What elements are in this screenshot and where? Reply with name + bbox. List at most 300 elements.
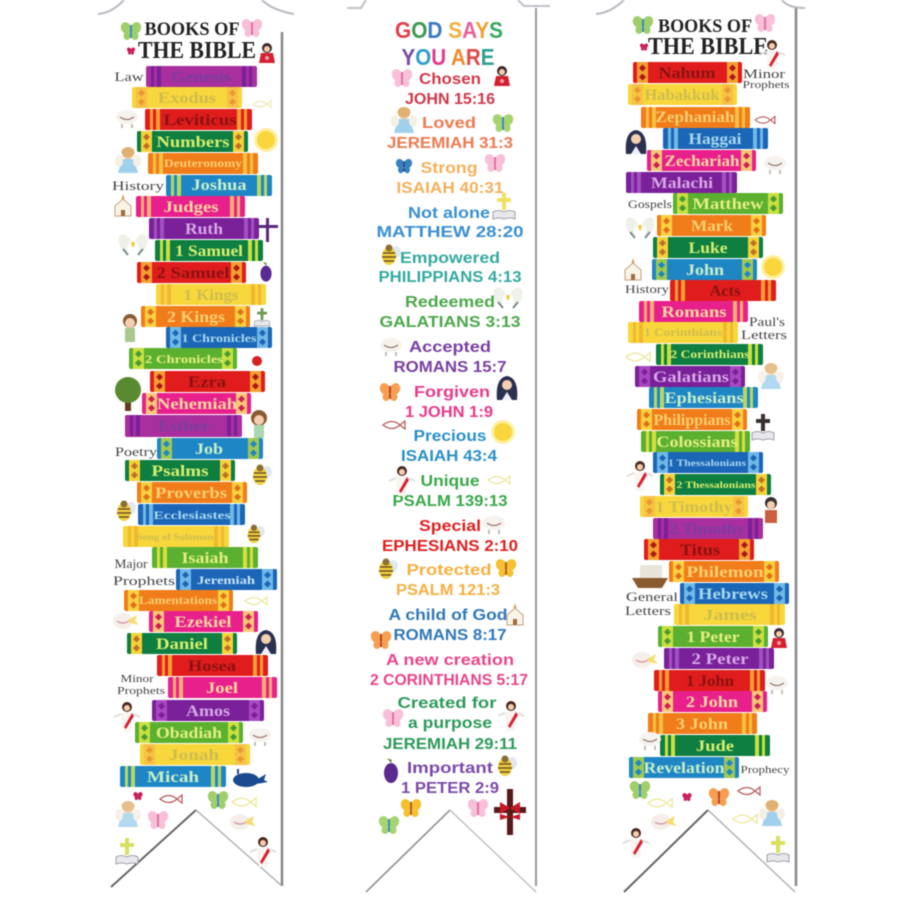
book: Ezekiel (149, 611, 258, 632)
verse: Redeemed (380, 294, 521, 331)
book: Haggai (663, 128, 768, 149)
icon: sheep (764, 156, 786, 174)
book: Song of Solomon: Song of Solomon (136, 532, 214, 542)
heading: books of the bible right (648, 16, 768, 60)
verse: Precious (401, 428, 497, 465)
category label: Minor Prophets (117, 673, 165, 697)
verse: Loved (387, 115, 513, 152)
verse: Unique: Unique (420, 473, 480, 490)
book: Jeremiah: Jeremiah (197, 575, 256, 587)
book: Exodus (132, 87, 242, 108)
category label: Paul's Letters: Paul's (749, 314, 785, 329)
book: 1 Thessalonians (653, 452, 763, 473)
icon: yellow fish (245, 597, 267, 605)
book: Malachi (626, 172, 737, 193)
verse: Accepted: Accepted (409, 339, 491, 356)
icon: nun (626, 130, 646, 154)
book: Mark: Mark (691, 218, 733, 235)
book: Luke: Luke (688, 240, 728, 257)
icon: bee (253, 464, 272, 485)
icon: yellow fish (626, 353, 650, 361)
verse: A child of God (388, 607, 508, 644)
icon: nun (497, 376, 517, 400)
book: Lamentations: Lamentations (139, 595, 218, 607)
verse: Redeemed: GALATIANS 3:13 (380, 314, 521, 331)
icon: green butterfly (631, 14, 655, 34)
verse: Loved: Loved (422, 115, 476, 132)
book: Obadiah (135, 722, 243, 743)
icon: bee (498, 756, 517, 776)
book: 1 Samuel: 1 Samuel (175, 243, 244, 260)
icon: boy (765, 497, 777, 523)
book: Leviticus: Leviticus (164, 112, 236, 129)
book: Haggai: Haggai (688, 131, 742, 148)
book: 1 Chronicles (166, 327, 272, 348)
book: Philemon (669, 561, 779, 582)
verse: Precious: ISAIAH 43:4 (401, 448, 497, 465)
verse: Not alone (376, 205, 524, 241)
book: Philippians: Philippians (654, 412, 730, 429)
verse: Created for a purpose (383, 695, 517, 753)
book: Habakkuk (628, 84, 737, 105)
book: Deuteronomy (148, 153, 258, 174)
verse: Not alone: Not alone (408, 205, 490, 222)
verse: Chosen: JOHN 15:16 (405, 91, 495, 108)
verse: A new creation: 2 CORINTHIANS 5:17 (370, 672, 528, 689)
book: 1 Thessalonians: 1 Thessalonians (668, 458, 747, 468)
book: Ephesians: Ephesians (664, 390, 744, 407)
icon: yellow fish (488, 476, 510, 484)
heading: god says you are (395, 17, 503, 70)
verse: Chosen: Chosen (419, 71, 481, 88)
icon: girl (251, 410, 267, 438)
book: Joshua: Joshua (192, 177, 246, 194)
book: Ruth: Ruth (185, 221, 223, 238)
book: Ezekiel: Ezekiel (174, 614, 232, 631)
category label: Poetry: Poetry (115, 444, 158, 459)
icon: cross and bible (767, 836, 789, 862)
book: 2 Samuel (137, 262, 246, 283)
icon: dove (116, 232, 150, 255)
icon: sun (254, 128, 278, 152)
verse: Strong (396, 160, 504, 197)
icon: fish (160, 795, 182, 803)
icon: grapes (260, 262, 272, 282)
book: 1 Corinthians: 1 Corinthians (644, 327, 723, 339)
category label: Major Prophets: Prophets (113, 573, 175, 588)
icon: church (625, 258, 641, 280)
icon: sheep with heart (766, 676, 788, 694)
book: Nahum: Nahum (658, 65, 716, 82)
icon: tree (115, 377, 141, 411)
book: Colossians: Colossians (656, 434, 738, 451)
book: 2 Chronicles (129, 348, 237, 369)
icon: jesus (250, 837, 276, 867)
icon: small red butterfly (126, 47, 136, 55)
verse: Special: EPHESIANS 2:10 (382, 538, 518, 555)
icon: sheep (483, 516, 505, 534)
book: 2 Thessalonians: 2 Thessalonians (676, 480, 756, 490)
icon: sheep (249, 728, 271, 746)
book: 1 Samuel (155, 240, 263, 261)
book: 1 Timothy: 1 Timothy (656, 499, 732, 516)
icon: jesus (114, 702, 140, 732)
verse: Important: 1 PETER 2:9 (401, 780, 499, 797)
book: Ezra: Ezra (188, 374, 226, 391)
book: Amos (152, 700, 264, 721)
verse: Forgiven: Forgiven (414, 384, 490, 401)
verse: Forgiven: 1 JOHN 1:9 (405, 404, 493, 421)
category label: Minor Prophets: Prophets (742, 80, 790, 91)
icon: angel (758, 363, 784, 389)
icon: pink butterfly (753, 12, 777, 32)
book: Exodus: Exodus (158, 90, 216, 107)
verse: Strong: ISAIAH 40:31 (396, 180, 504, 197)
icon: sheep with butterfly (632, 652, 658, 668)
book: Nahum (633, 62, 742, 83)
verse: Created for a purpose: a purpose (408, 715, 492, 732)
book: Song of Solomon (123, 526, 229, 547)
book: 2 John (658, 691, 767, 712)
book: Ruth (149, 218, 259, 239)
book: Micah (120, 766, 226, 787)
book: 1 John (654, 670, 765, 691)
book: 2 John: 2 John (686, 694, 738, 711)
book: Habakkuk: Habakkuk (644, 87, 720, 104)
book: John: John (686, 262, 724, 279)
icon: angel (115, 147, 141, 173)
book: 2 Kings: 2 Kings (167, 309, 225, 326)
verse: Loved: JEREMIAH 31:3 (387, 135, 513, 152)
icon: red doll (259, 43, 275, 63)
book: 1 John: 1 John (686, 673, 734, 690)
icon: church (507, 603, 523, 625)
book: Revelation (629, 757, 739, 778)
book: 1 Chronicles: 1 Chronicles (182, 333, 257, 345)
icon: fish (755, 116, 775, 124)
verse: A new creation (370, 652, 528, 689)
book: Zechariah (647, 150, 756, 171)
category label: General Letters (625, 589, 678, 618)
icon: sun (491, 420, 515, 444)
icon: sheep with butterfly (651, 814, 677, 830)
icon: yellow fish (648, 799, 672, 807)
icon: yellow fish (733, 815, 757, 823)
verse: Not alone: MATTHEW 28:20 (376, 224, 524, 241)
book: Isaiah: Isaiah (182, 550, 229, 567)
book: 1 Corinthians (628, 322, 738, 343)
book: Romans: Romans (662, 304, 726, 321)
book: Isaiah (152, 547, 258, 568)
icon: pink butterfly (466, 797, 490, 817)
book: Genesis (146, 66, 257, 87)
book: Hebrews: Hebrews (698, 586, 768, 603)
icon: sheep with butterfly (230, 814, 256, 830)
icon: dove (623, 215, 657, 238)
book: 2 Timothy: 2 Timothy (669, 521, 745, 538)
book: Galatians: Galatians (653, 369, 729, 386)
icon: sheep (639, 732, 661, 750)
verse: Unique: PSALM 139:13 (392, 493, 508, 510)
icon: bee (117, 500, 136, 521)
book: 2 Timothy (653, 518, 763, 539)
book: Proverbs: Proverbs (155, 485, 227, 502)
book: James (674, 604, 785, 625)
book: Titus (644, 539, 754, 560)
book: 2 Thessalonians (660, 474, 771, 495)
icon: whale (233, 769, 268, 787)
book: Malachi: Malachi (651, 175, 714, 192)
icon: jesus (623, 828, 649, 858)
book: Galatians (635, 366, 745, 387)
book: Hebrews (680, 583, 789, 604)
icon: green butterfly (206, 789, 230, 809)
verse: Protected: PSALM 121:3 (396, 582, 500, 599)
icon: red ribbon cross (494, 789, 526, 835)
panel: center banner (347, 0, 550, 895)
verse: Forgiven (405, 384, 493, 421)
icon: angel (115, 801, 141, 827)
category label: Paul's Letters (741, 314, 787, 342)
book: Nehemiah: Nehemiah (157, 396, 237, 413)
book: Esther (125, 415, 242, 437)
category label: Minor Prophets: Minor (120, 673, 154, 685)
icon: pink butterfly (240, 17, 264, 37)
verse: A child of God: ROMANS 8:17 (394, 627, 507, 644)
book: Job: Job (195, 441, 223, 458)
icon: dove (491, 285, 525, 308)
book: 2 Peter: 2 Peter (692, 651, 748, 668)
book: Amos: Amos (186, 703, 230, 720)
icon: small red butterfly (682, 792, 692, 801)
book: 1 Peter: 1 Peter (686, 629, 740, 646)
heading: books of the bible left (138, 19, 256, 64)
book: Joel: Joel (206, 680, 239, 697)
icon: angel (391, 107, 417, 133)
book: Esther: Esther (158, 418, 210, 435)
category label: Minor Prophets: Minor (743, 66, 786, 81)
verse: Empowered (378, 250, 522, 286)
category label: History: History (112, 178, 165, 193)
heading: god says you are: GOD SAYS (395, 17, 503, 43)
icon: grapes (384, 758, 398, 783)
verse: Chosen (405, 71, 495, 108)
book: Daniel (127, 633, 237, 654)
icon: church (115, 194, 131, 216)
book: Daniel: Daniel (156, 636, 209, 653)
book: Ezra (150, 371, 265, 392)
icon: gold butterfly (494, 557, 518, 577)
book: Jude: Jude (696, 738, 734, 755)
verse: Unique (392, 473, 508, 510)
icon: nun (256, 630, 276, 654)
verse: Special (382, 518, 518, 555)
book: Deuteronomy: Deuteronomy (164, 158, 242, 170)
icon: orange butterfly (378, 381, 402, 401)
book: 2 Peter (664, 648, 774, 669)
book: Jeremiah (176, 569, 277, 590)
icon: green butterfly (491, 112, 515, 132)
book: Ecclesiastes: Ecclesiastes (154, 510, 231, 522)
category label: Prophecy: Prophecy (740, 764, 790, 776)
book: Zephaniah (641, 107, 750, 128)
icon: jesus (498, 701, 524, 731)
book: Micah: Micah (147, 769, 199, 786)
book: 1 Timothy (640, 496, 748, 517)
category label: Gospels: Gospels (628, 197, 672, 211)
heading: books of the bible left: THE BIBLE (138, 38, 256, 64)
book: Leviticus (145, 109, 252, 130)
icon: jesus (389, 466, 415, 496)
book: Zechariah: Zechariah (664, 153, 740, 170)
icon: orange butterfly (369, 629, 393, 649)
category label: History: History (625, 282, 669, 296)
category label: General Letters: General (626, 589, 678, 604)
icon: green bee (248, 525, 265, 543)
book: 1 Kings: 1 Kings (184, 287, 238, 304)
book: Colossians (641, 431, 750, 452)
heading: books of the bible right: THE BIBLE (648, 34, 768, 60)
icon: orange butterfly (707, 786, 731, 806)
icon: red doll (494, 66, 510, 86)
book: Job (157, 438, 263, 459)
book: Romans (639, 301, 748, 322)
icon: apple (252, 356, 262, 366)
icon: fish (383, 421, 405, 429)
icon: jesus (627, 461, 653, 491)
verse: Protected (396, 562, 500, 599)
icon: bible cross (493, 193, 515, 219)
icon: bee (382, 244, 401, 265)
book: Joshua (166, 175, 272, 196)
icon: cross and bible (116, 838, 138, 864)
icon: boy (123, 314, 137, 342)
heading: god says you are: YOU ARE (402, 44, 495, 70)
verse: A child of God: A child of God (388, 607, 508, 624)
icon: gold butterfly (399, 797, 423, 817)
verse: Redeemed: Redeemed (405, 294, 495, 311)
icon: purple cross (257, 218, 278, 242)
book: Judges: Judges (164, 199, 218, 216)
book: Hosea (157, 655, 268, 676)
book: Numbers: Numbers (156, 134, 230, 151)
icon: yellow fish (232, 798, 256, 806)
book: Revelation: Revelation (644, 760, 725, 777)
category label: Minor Prophets: Prophets (117, 685, 165, 697)
book: Titus: Titus (680, 542, 720, 559)
book: Luke (653, 237, 763, 258)
book: Philemon: Philemon (686, 564, 764, 581)
icon: sun (761, 255, 785, 279)
panel: right banner (596, 0, 805, 895)
category label: Law: Law (114, 69, 144, 84)
book: Proverbs (137, 482, 247, 503)
icon: pink butterfly (483, 152, 507, 172)
book: James: James (704, 607, 756, 624)
verse: Strong: Strong (420, 160, 478, 177)
icon: pink butterfly (146, 809, 170, 829)
book: Mark (657, 215, 766, 236)
verse: Accepted: ROMANS 15:7 (394, 359, 507, 376)
heading: books of the bible right: BOOKS OF (658, 16, 752, 37)
icon: angel (759, 800, 785, 826)
book: Acts (670, 280, 776, 301)
book: Ephesians (649, 387, 758, 408)
icon: red doll (771, 628, 787, 648)
verse: Created for a purpose: JEREMIAH 29:11 (383, 736, 517, 753)
book: 1 Kings (156, 284, 266, 305)
book: Matthew (673, 193, 783, 214)
verse: Created for a purpose: Created for (398, 695, 496, 712)
category label: Major Prophets: Major (114, 556, 148, 571)
book: Nehemiah (142, 393, 251, 414)
book: 2 Samuel: 2 Samuel (156, 265, 230, 282)
icon: blue butterfly (394, 158, 414, 173)
verse: Accepted (394, 339, 507, 376)
book: 3 John (648, 713, 757, 734)
category label: Minor Prophets (742, 66, 790, 91)
icon: small red butterfly (639, 43, 649, 51)
icon: small butterfly (133, 791, 143, 800)
icon: pink butterfly (381, 707, 405, 727)
category label: Paul's Letters: Letters (741, 327, 787, 342)
icon: yellow fish (253, 101, 271, 107)
book: Matthew: Matthew (692, 196, 764, 213)
book: Lamentations (124, 590, 233, 611)
book: John (652, 259, 757, 280)
book: 2 Kings (141, 306, 250, 327)
book: Philippians (637, 409, 747, 430)
category label: General Letters: Letters (625, 603, 671, 618)
verse: Special: Special (419, 518, 481, 535)
verse: Important: Important (407, 760, 494, 777)
icon: cross and bible (752, 414, 774, 440)
book: Ecclesiastes (138, 504, 245, 525)
icon: cross and bible (254, 308, 270, 326)
icon: jesus (759, 40, 785, 70)
book: Zephaniah: Zephaniah (656, 109, 735, 126)
book: Judges (136, 196, 245, 217)
icon: green butterfly (377, 814, 401, 834)
verse: Empowered: PHILIPPIANS 4:13 (378, 269, 522, 286)
verse: Empowered: Empowered (400, 250, 500, 267)
icon: sheep with heart (380, 338, 402, 356)
book: Jonah (140, 744, 250, 765)
icon: bee (379, 558, 398, 579)
book: 2 Corinthians: 2 Corinthians (670, 349, 750, 361)
verse: Important (401, 760, 499, 797)
book: Numbers (137, 131, 248, 152)
icon: fish (738, 787, 760, 795)
book: Acts: Acts (710, 283, 740, 300)
book: Psalms (125, 460, 235, 481)
panel: left banner (98, 0, 294, 895)
book: 3 John: 3 John (676, 716, 728, 733)
book: Psalms: Psalms (152, 463, 208, 480)
verse: A new creation: A new creation (386, 652, 514, 669)
category label: Major Prophets (113, 556, 175, 588)
icon: pink butterfly (390, 67, 414, 87)
verse: Protected: Protected (406, 562, 492, 579)
icon: ark (632, 565, 668, 588)
icon: sheep (116, 110, 138, 128)
heading: books of the bible left: BOOKS OF (144, 19, 240, 40)
book: 2 Chronicles: 2 Chronicles (145, 354, 224, 366)
book: 2 Corinthians (656, 344, 763, 365)
icon: green butterfly (119, 20, 143, 40)
book: Hosea: Hosea (188, 658, 236, 675)
icon: sheep with butterfly (113, 613, 139, 629)
